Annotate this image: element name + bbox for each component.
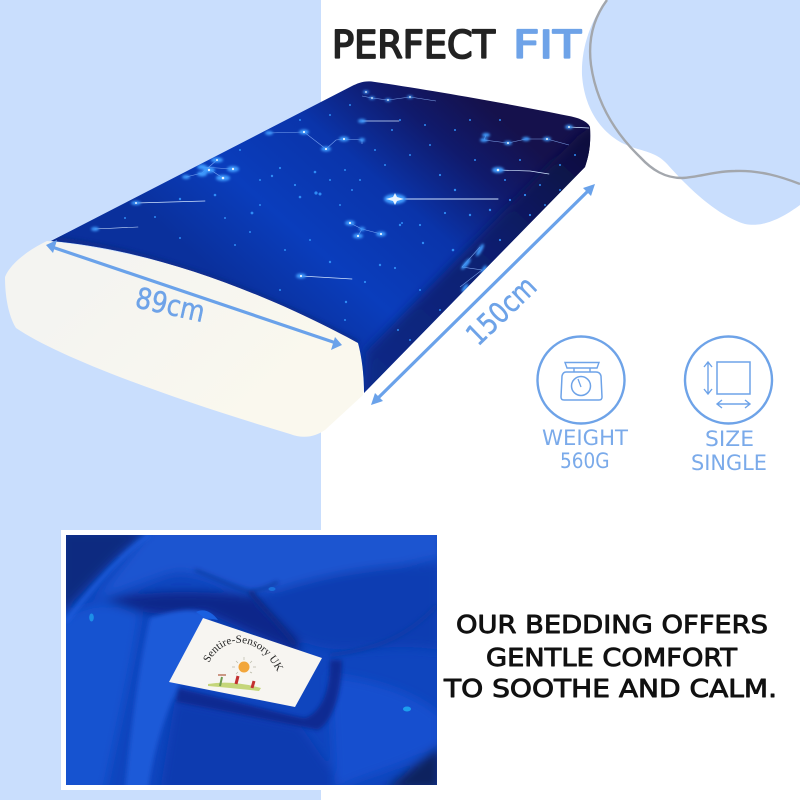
fabric dots <box>89 614 94 622</box>
arrow: 150cm length <box>371 184 595 405</box>
title <box>332 23 582 67</box>
label: size: SIZE <box>705 427 754 451</box>
constellations <box>186 96 569 287</box>
fabric folds <box>60 530 440 790</box>
star cores <box>135 91 570 277</box>
icon: weighing scale <box>538 336 624 424</box>
label: weight: 560G <box>560 449 610 473</box>
sheet edge dark <box>50 238 358 343</box>
caption: TO SOOTHE AND CALM. <box>443 674 777 703</box>
caption <box>443 610 777 703</box>
decorative blob: top right <box>582 0 800 225</box>
label text: Sentire-Sensory UK <box>204 636 284 672</box>
label: 150cm: 150cm <box>459 269 543 352</box>
mattress illustration <box>5 70 600 437</box>
sewn label <box>169 618 322 707</box>
label: 89cm: 89cm <box>132 281 208 329</box>
label logo <box>208 657 261 691</box>
fold highlights <box>66 535 384 785</box>
label: weight <box>542 426 628 473</box>
fitted sheet <box>51 81 590 393</box>
title: FIT <box>513 23 582 67</box>
caption: OUR BEDDING OFFERS <box>456 610 768 639</box>
photo: fabric with label <box>66 535 437 785</box>
label: weight: WEIGHT <box>542 426 628 450</box>
pocket rim <box>196 610 218 620</box>
title: PERFECT <box>332 23 496 67</box>
scattered stars <box>124 104 576 341</box>
white mattress <box>5 241 363 437</box>
arrow: 89cm width <box>46 240 342 350</box>
photo frame <box>61 530 442 790</box>
icon: size <box>685 336 772 424</box>
sheet side band <box>364 120 600 410</box>
label: size <box>691 427 767 475</box>
star glows <box>91 90 573 293</box>
label: size: SINGLE <box>691 451 767 475</box>
shooting stars <box>95 121 589 279</box>
caption: GENTLE COMFORT <box>486 643 738 672</box>
background panel: left blue <box>0 0 321 800</box>
